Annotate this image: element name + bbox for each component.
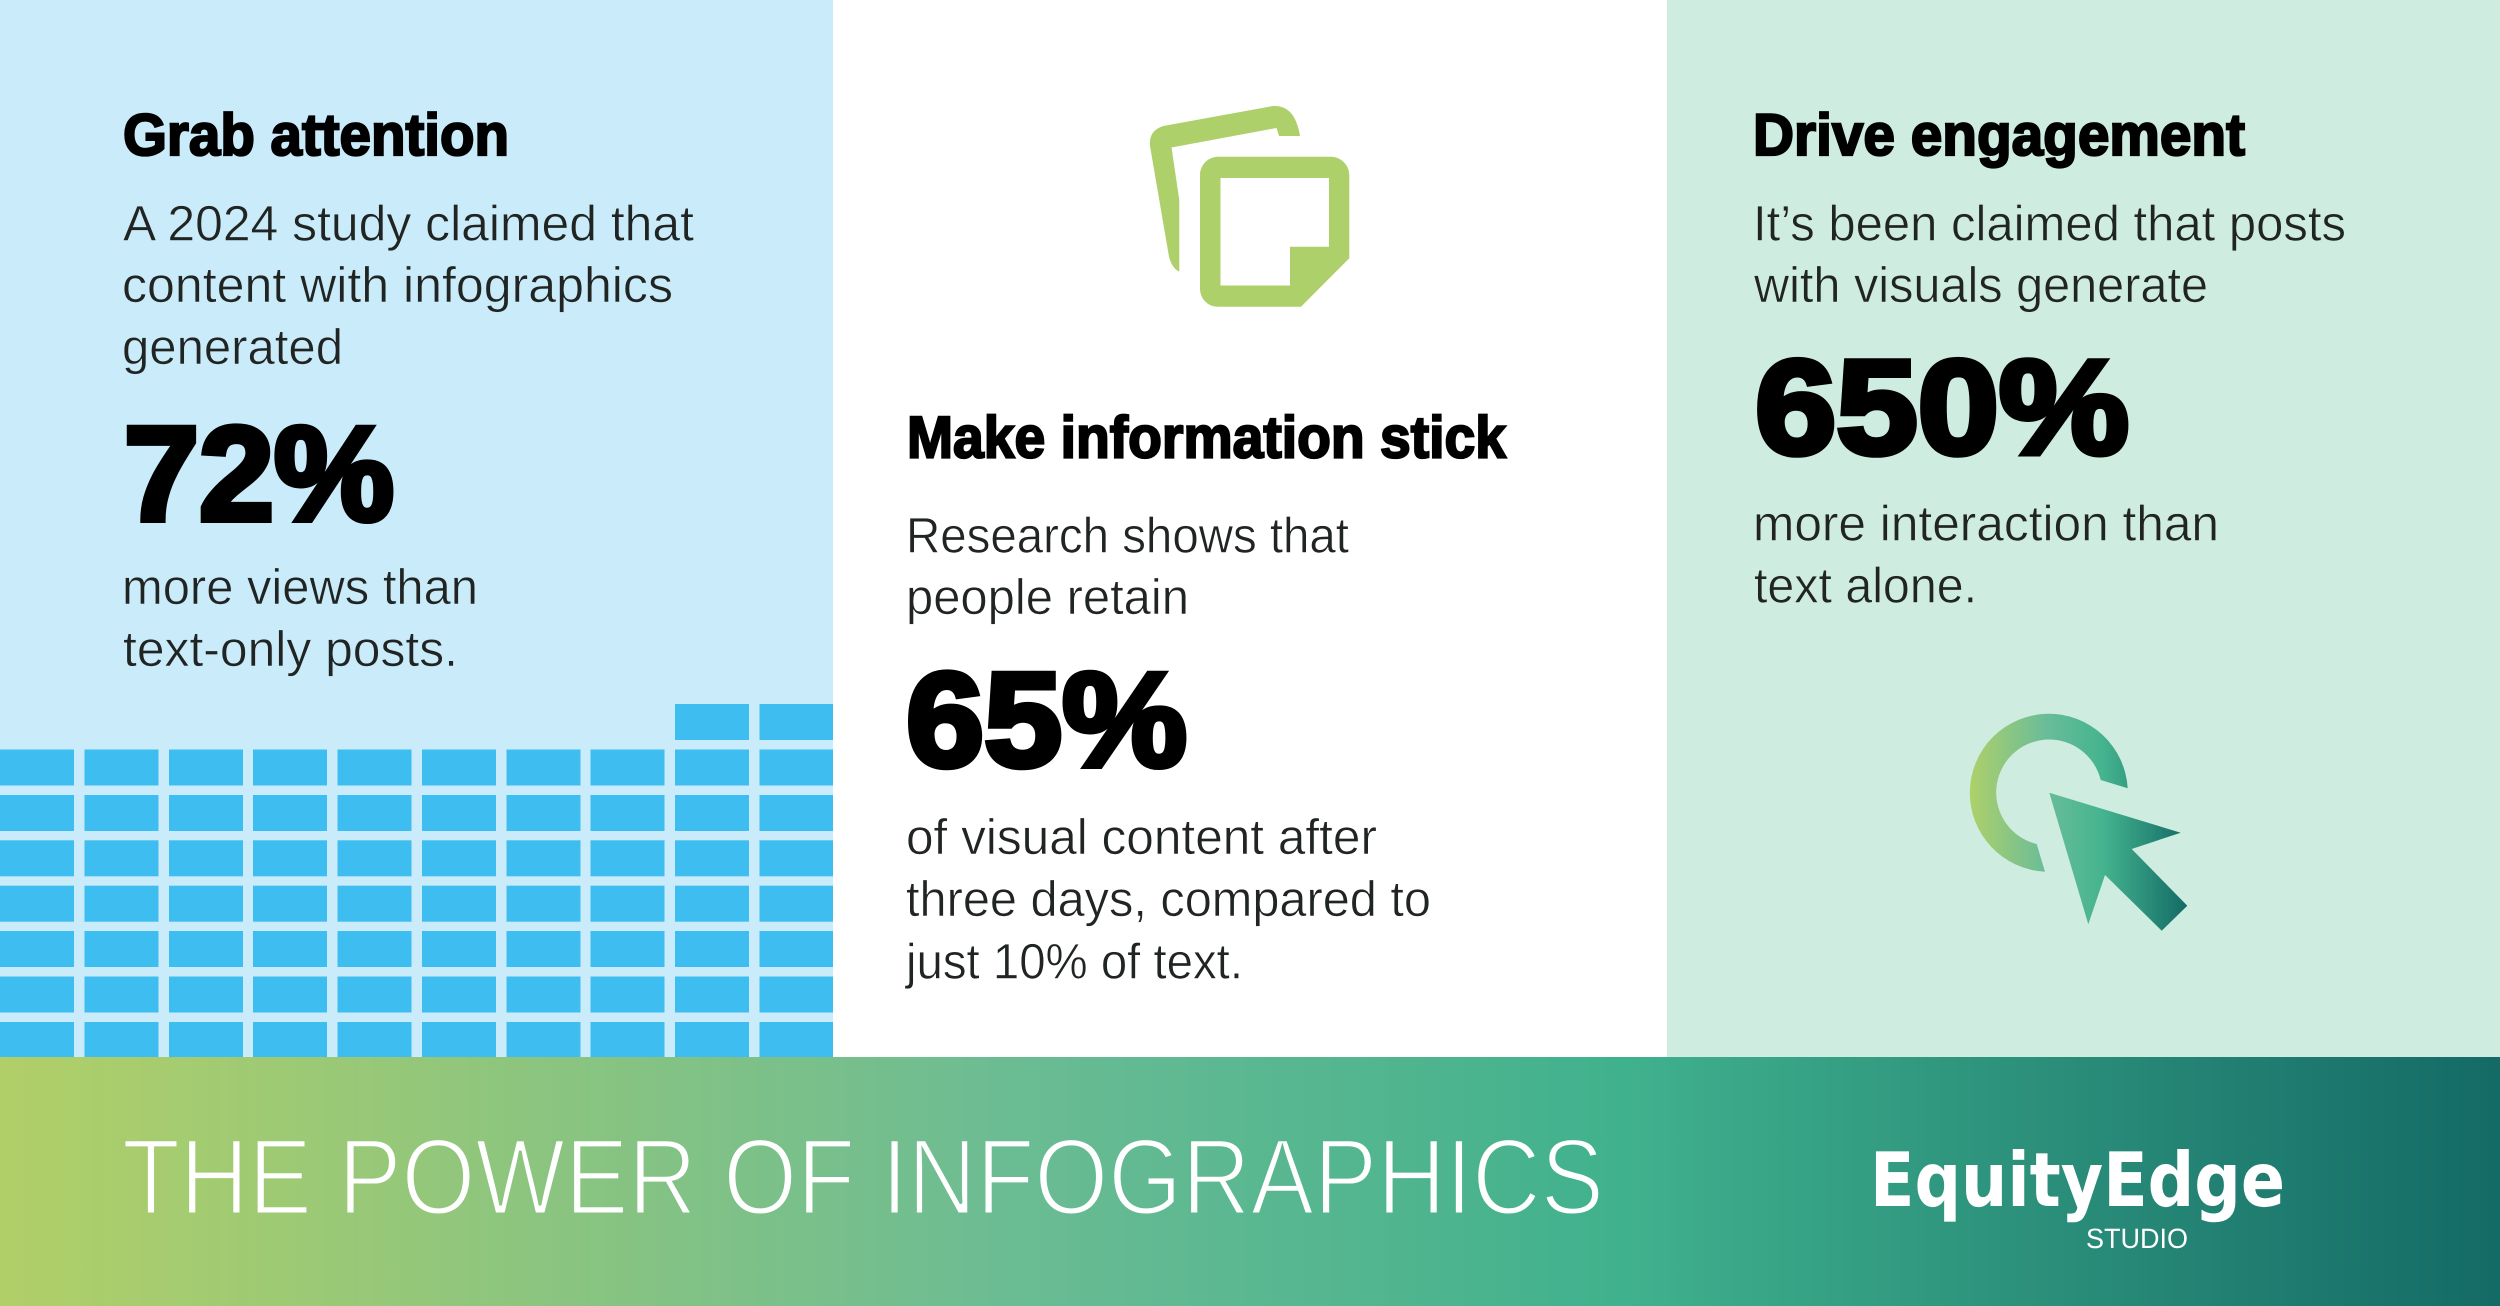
text block: visual content retention: three days, compared to [906, 871, 1431, 927]
logo: EquityEdge Studio: EquityEdge [1870, 1136, 2285, 1224]
text block: posts with visuals: It’s been claimed that posts [1753, 196, 2346, 252]
text block: more views [122, 559, 478, 677]
logo: EquityEdge Studio: STUDIO [2086, 1223, 2188, 1254]
text block: visual content retention: just 10% of text. [904, 933, 1243, 989]
text block: research intro [906, 507, 1349, 625]
text block: study intro: content with infographics [122, 257, 673, 313]
text block: research intro: Research shows that [906, 507, 1349, 563]
text block: posts with visuals [1753, 196, 2346, 313]
text block: study intro: A 2024 study claimed that [123, 196, 694, 252]
text block: more views: text-only posts. [123, 621, 458, 677]
footer banner [0, 1057, 2500, 1306]
chart: blue block grid [0, 704, 833, 1057]
panel: grab attention [0, 0, 833, 1057]
text block: more interaction: more interaction than [1753, 496, 2219, 552]
text block: more interaction [1753, 496, 2219, 614]
text block: more interaction: text alone. [1754, 558, 1977, 614]
text block: study intro: generated [122, 319, 343, 375]
stat: 650%: 650% [1755, 334, 2129, 482]
title: THE POWER OF INFOGRAPHICS [122, 1116, 1604, 1237]
panel: make information stick [833, 0, 1667, 1057]
text block: research intro: people retain [906, 569, 1189, 625]
stat: 65%: 65% [906, 646, 1187, 795]
icon: click cursor [1970, 714, 2187, 931]
heading: drive engagement: Drive engagement [1753, 102, 2245, 168]
heading: grab attention: Grab attention [123, 102, 509, 168]
text block: more views: more views than [122, 559, 478, 615]
text block: visual content retention: of visual content after [906, 809, 1377, 865]
heading: make information stick: Make information stick [907, 405, 1506, 471]
text block: posts with visuals: with visuals generate [1753, 257, 2208, 313]
stat: 72%: 72% [124, 400, 394, 549]
text block: visual content retention [904, 809, 1431, 989]
panel: drive engagement [1667, 0, 2500, 1057]
text block: study intro [122, 196, 694, 375]
icon: sticky notes [1150, 106, 1349, 307]
logo: EquityEdge Studio [1870, 1136, 2285, 1254]
